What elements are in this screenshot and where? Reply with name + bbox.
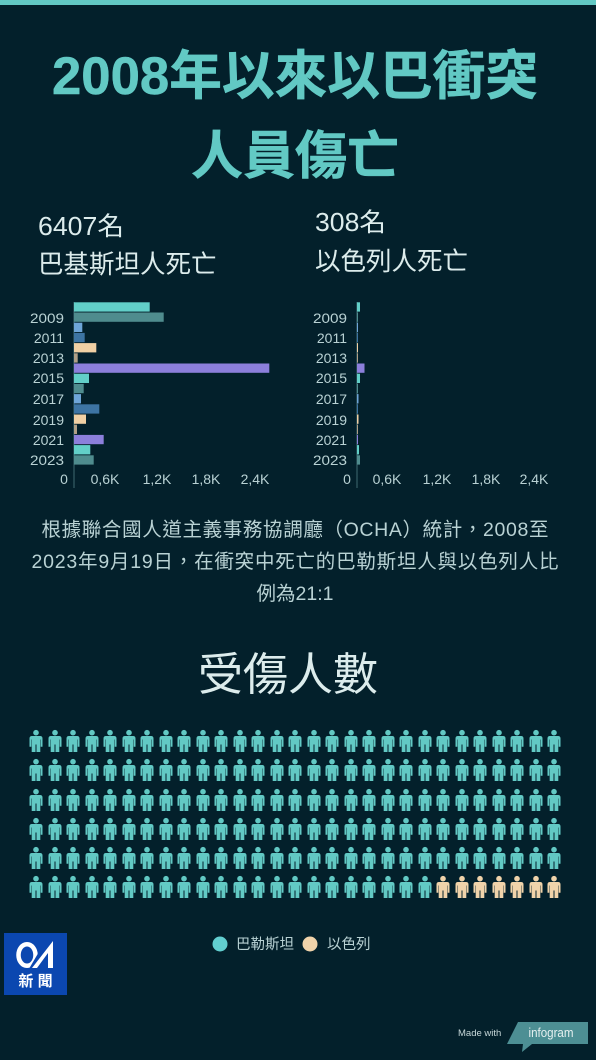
stat: Israeli deaths: 以色列人死亡: [315, 248, 468, 276]
bar chart: Israeli deaths: 2023: [313, 452, 347, 468]
bar chart: Palestinian deaths: 2017: [33, 391, 64, 407]
title: 2008年以來以巴衝突: [52, 47, 538, 106]
bar chart: Israeli deaths: 1,2K: [423, 471, 452, 487]
stat: Palestinian deaths: [38, 213, 217, 279]
bar chart: Palestinian deaths: 2011: [34, 330, 64, 346]
bar chart: Israeli deaths: 0: [343, 471, 351, 487]
bar chart: Israeli deaths: 2013: [316, 350, 347, 366]
description text: 2023年9月19日，在衝突中死亡的巴勒斯坦人與以色列人比: [32, 551, 558, 573]
bar chart: Palestinian deaths: 1,8K: [192, 471, 221, 487]
legend: [212, 936, 370, 953]
bar chart: Palestinian deaths: 2015: [33, 370, 64, 386]
bar chart: Palestinian deaths: 0,6K: [91, 471, 120, 487]
made with infogram badge: infogram: [528, 1025, 574, 1040]
pictogram: injured people: [30, 730, 560, 898]
heading: injured: 受傷人數: [198, 649, 378, 700]
bar chart: Israeli deaths: 0,6K: [373, 471, 402, 487]
description text: 根據聯合國人道主義事務協調廳（OCHA）統計，2008至: [42, 519, 548, 541]
bar chart: Israeli deaths: 2009: [313, 310, 347, 326]
bar chart: Palestinian deaths: 1,2K: [143, 471, 172, 487]
bar chart: Palestinian deaths: [30, 302, 270, 488]
stat: Israeli deaths: [315, 209, 468, 276]
bar chart: Palestinian deaths: 2,4K: [241, 471, 270, 487]
bar chart: Palestinian deaths: 2009: [30, 310, 64, 326]
logo: HK01 news: [4, 933, 67, 995]
legend: 以色列: [327, 936, 370, 953]
title: 人員傷亡: [191, 128, 399, 186]
made with infogram badge: [458, 1022, 588, 1052]
bar chart: Israeli deaths: 2,4K: [520, 471, 549, 487]
stat: Palestinian deaths: 6407名: [38, 213, 124, 241]
bar chart: Israeli deaths: 2015: [316, 370, 347, 386]
bar chart: Palestinian deaths: 2013: [33, 350, 64, 366]
bar chart: Israeli deaths: 1,8K: [472, 471, 501, 487]
description text: 例為21:1: [257, 583, 333, 605]
title: [52, 47, 538, 186]
top accent bar: [0, 0, 596, 5]
bar chart: Israeli deaths: [313, 302, 549, 488]
bar chart: Palestinian deaths: 2023: [30, 452, 64, 468]
stat: Israeli deaths: 308名: [315, 209, 386, 237]
description text: [32, 519, 558, 605]
bar chart: Israeli deaths: 2017: [316, 391, 347, 407]
bar chart: Palestinian deaths: 0: [60, 471, 68, 487]
stat: Palestinian deaths: 巴基斯坦人死亡: [38, 251, 217, 279]
bar chart: Israeli deaths: 2021: [316, 432, 347, 448]
bar chart: Israeli deaths: 2019: [316, 412, 347, 428]
logo: HK01 news: 新 聞: [18, 972, 53, 990]
bar chart: Palestinian deaths: 2019: [33, 412, 64, 428]
legend: 巴勒斯坦: [236, 936, 294, 953]
bar chart: Palestinian deaths: 2021: [33, 432, 64, 448]
made with infogram badge: Made with: [458, 1028, 501, 1039]
bar chart: Israeli deaths: 2011: [317, 330, 347, 346]
